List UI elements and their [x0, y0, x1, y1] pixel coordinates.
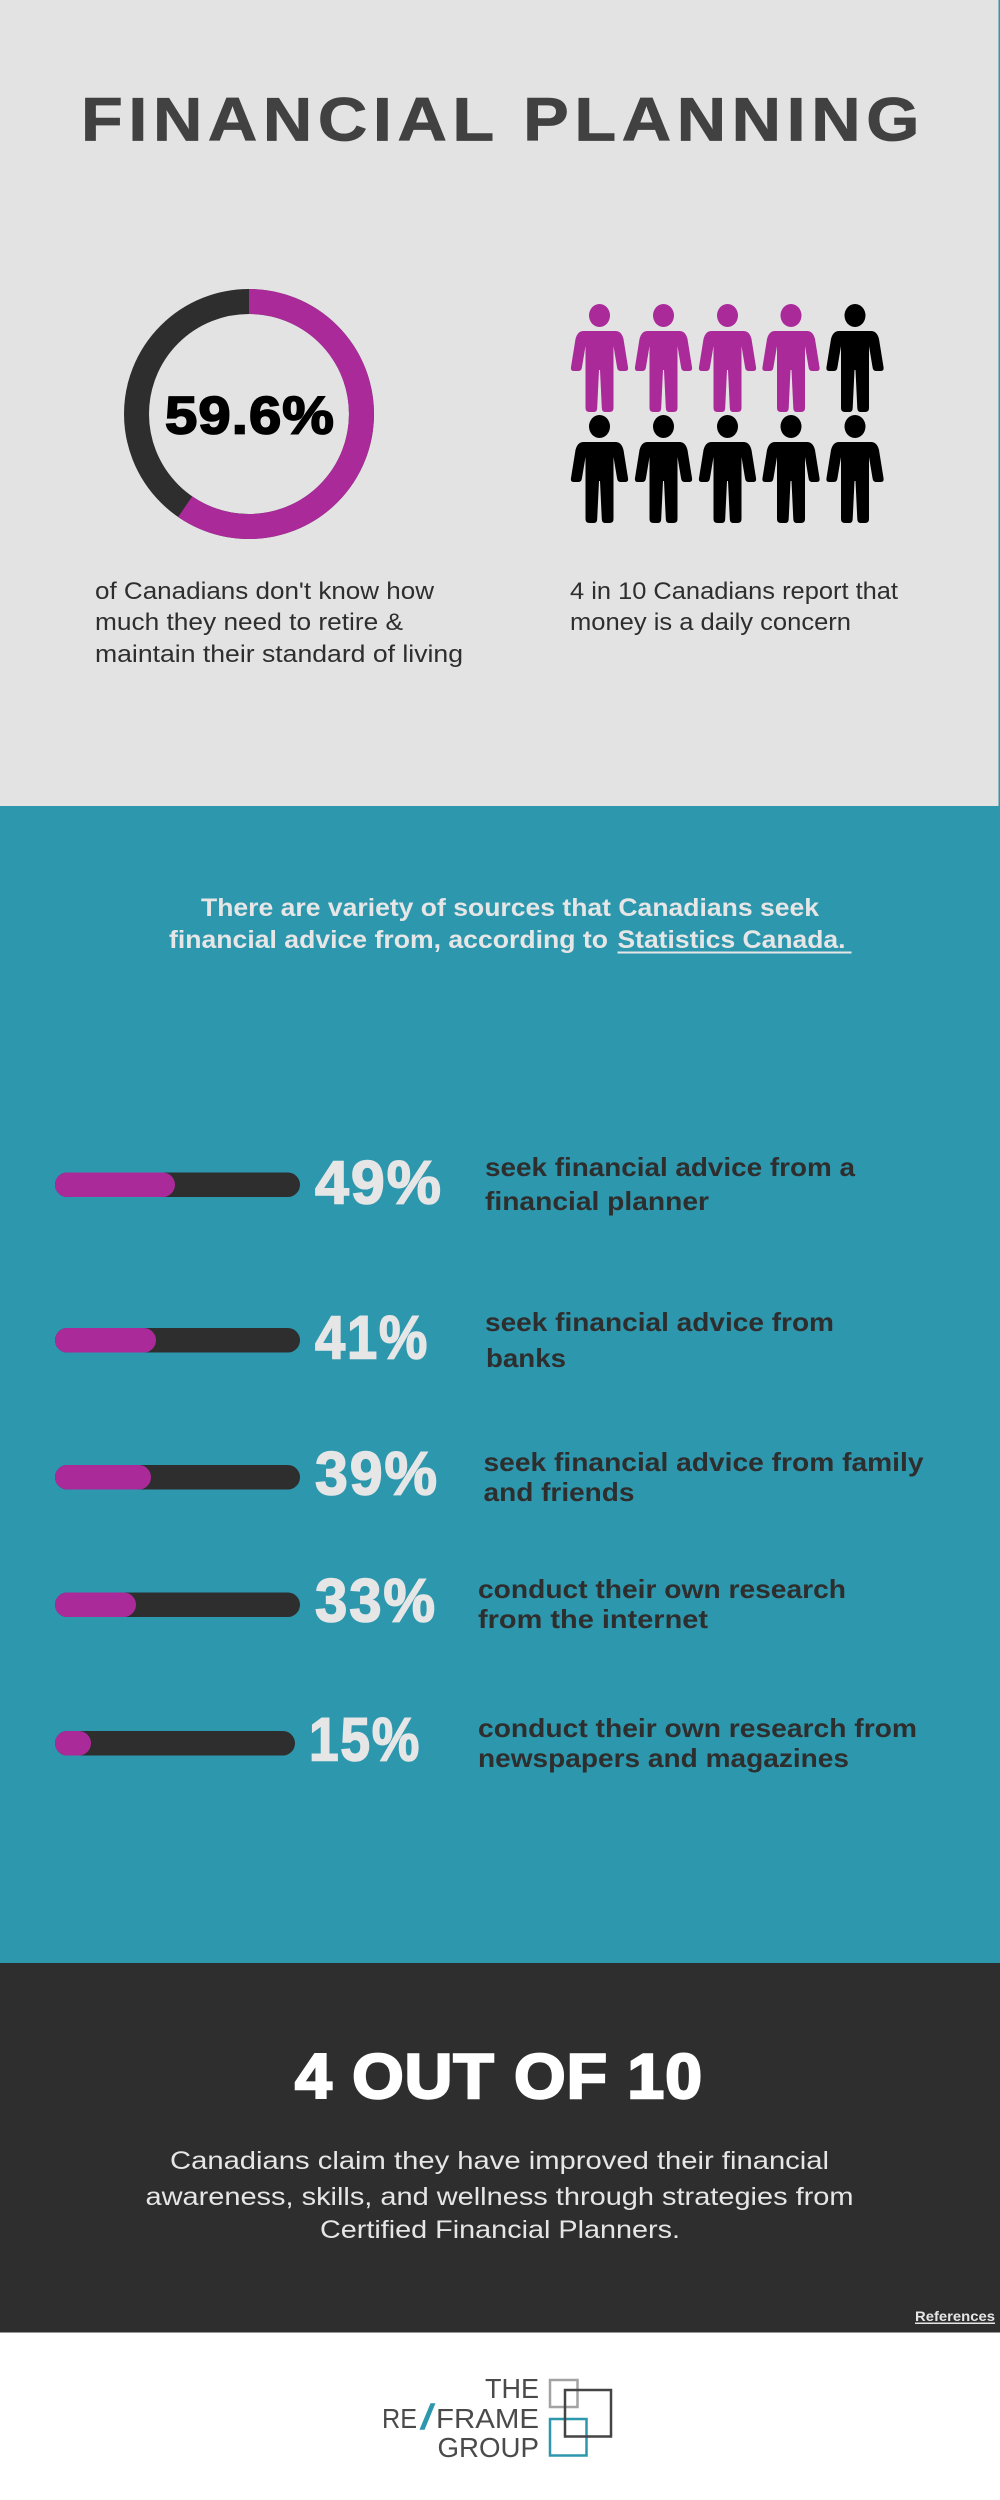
text: daily money concern statistic: money is a daily concern — [570, 609, 851, 636]
row: 33% internet research: 33% — [315, 1566, 437, 1634]
callout text: Certified Financial Planners. — [320, 2216, 680, 2244]
heading: sources intro: financial advice from, according to — [169, 926, 608, 954]
row: 15% newspapers and magazines: 15% — [309, 1706, 421, 1774]
callout heading: 4 OUT OF 10 — [295, 2042, 703, 2112]
row: 39% family and friends — [55, 1440, 924, 1508]
row: 39% family and friends: 39% — [315, 1440, 439, 1508]
donut chart: 59.6% — [136, 302, 362, 526]
row: 49% financial planner: seek financial advice from a — [485, 1152, 856, 1182]
row: 41% banks: seek financial advice from — [485, 1307, 834, 1337]
references link: References — [915, 2308, 995, 2324]
text: retirement statistic — [95, 578, 463, 668]
text: retirement statistic: much they need to retire & — [95, 609, 403, 636]
row: 15% newspapers and magazines: conduct their own research from — [478, 1713, 917, 1743]
logo: The Re/Frame Group: / — [420, 2398, 435, 2437]
row: 39% family and friends: seek financial advice from family — [484, 1447, 924, 1477]
text: retirement statistic: of Canadians don't know how — [95, 578, 435, 605]
callout text: Canadians claim they have improved their financial — [170, 2147, 829, 2175]
row: 33% internet research — [55, 1566, 846, 1634]
row: 49% financial planner — [55, 1148, 856, 1216]
logo: The Re/Frame Group — [382, 2373, 611, 2463]
heading: sources intro — [169, 894, 852, 954]
row: 15% newspapers and magazines — [55, 1706, 917, 1774]
title: FINANCIAL PLANNING — [81, 86, 925, 154]
row: 39% family and friends: and friends — [484, 1477, 634, 1507]
row: 41% banks: banks — [486, 1343, 566, 1373]
text: daily money concern statistic: 4 in 10 Canadians report that — [570, 578, 898, 605]
logo: The Re/Frame Group: RE — [382, 2403, 417, 2434]
row: 33% internet research: from the internet — [478, 1604, 708, 1634]
row: 49% financial planner: financial planner — [485, 1186, 709, 1216]
heading: sources intro: There are variety of sources that Canadians seek — [201, 894, 819, 922]
panel: sources of financial advice — [0, 806, 1000, 1963]
row: 41% banks — [55, 1304, 834, 1373]
logo: The Re/Frame Group: FRAME — [436, 2403, 539, 2434]
donut chart: 59.6%: 59.6% — [165, 386, 335, 446]
callout text — [146, 2147, 854, 2244]
row: 15% newspapers and magazines: newspapers and magazines — [478, 1743, 849, 1773]
row: 49% financial planner: 49% — [315, 1148, 443, 1216]
row: 33% internet research: conduct their own research — [478, 1574, 846, 1604]
panel: financial planning statistics — [0, 0, 1000, 806]
row: 41% banks: 41% — [315, 1304, 429, 1372]
icon: ten people pictogram, four highlighted — [571, 304, 884, 523]
heading: sources intro: Statistics Canada. — [618, 926, 846, 954]
logo: The Re/Frame Group: GROUP — [438, 2432, 539, 2463]
callout text: awareness, skills, and wellness through strategies from — [146, 2183, 854, 2211]
text: retirement statistic: maintain their standard of living — [95, 641, 463, 668]
text: daily money concern statistic — [570, 578, 898, 636]
logo: The Re/Frame Group: THE — [485, 2373, 539, 2404]
panel: 4 out of 10 callout — [0, 1963, 1000, 2332]
